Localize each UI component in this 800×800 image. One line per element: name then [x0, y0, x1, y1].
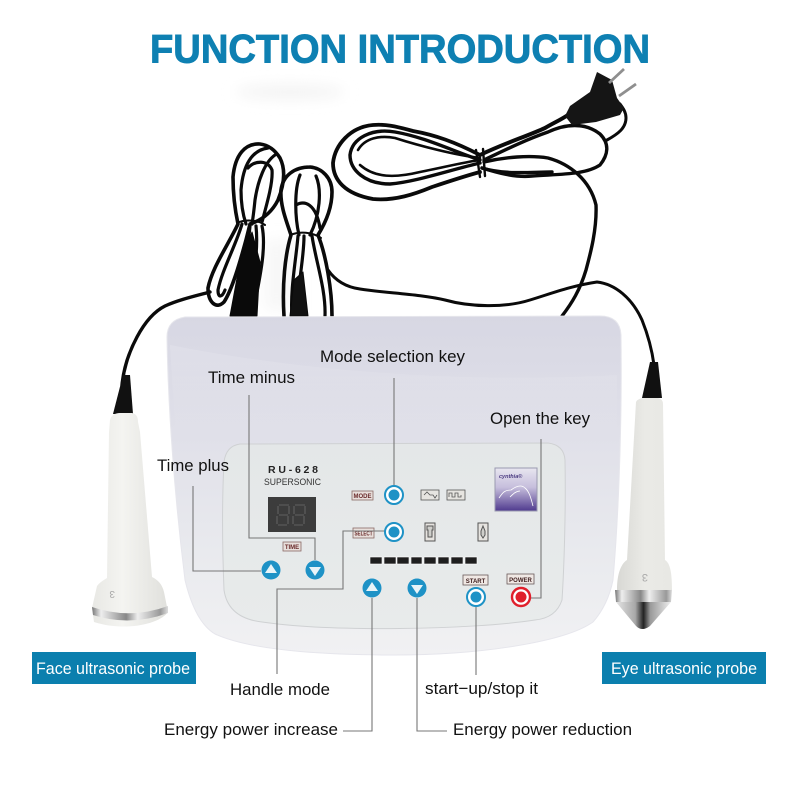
label: mode selection key: Mode selection key	[320, 347, 465, 366]
connector lines	[193, 378, 541, 731]
callout: face ultrasonic probe	[32, 652, 196, 684]
title: FUNCTION INTRODUCTION	[150, 28, 650, 72]
key labels: SELECT	[354, 532, 373, 538]
key labels: TIME	[285, 545, 299, 551]
model name: SUPERSONIC	[264, 477, 321, 487]
energy increase key	[362, 578, 382, 598]
callout: eye ultrasonic probe	[602, 652, 766, 684]
handle mode icons	[425, 523, 488, 541]
time plus key	[262, 560, 280, 580]
label: start-up/stop it: start−up/stop it	[425, 679, 538, 698]
label: open the key: Open the key	[490, 409, 590, 428]
face ultrasonic probe: 3	[109, 588, 115, 599]
mode key	[385, 486, 403, 504]
faint table shadows	[235, 85, 345, 310]
label: time plus: Time plus	[157, 456, 229, 475]
label: energy power reduction: Energy power reduction	[453, 720, 632, 739]
label: handle mode: Handle mode	[230, 680, 330, 699]
model name	[264, 464, 321, 487]
power key	[512, 588, 530, 606]
callout: eye ultrasonic probe: Eye ultrasonic probe	[611, 660, 757, 678]
long probe cable	[328, 270, 654, 365]
energy level bar	[370, 557, 477, 564]
waveform icons	[421, 490, 465, 500]
eye ultrasonic probe	[615, 362, 672, 629]
right bundle	[281, 167, 332, 316]
left bundle	[208, 144, 284, 305]
time minus key	[306, 560, 324, 580]
key labels: MODE	[354, 494, 372, 500]
device body	[167, 316, 621, 655]
digital display	[268, 497, 316, 532]
brand logo	[495, 468, 537, 511]
model name: RU-628	[268, 464, 318, 476]
key labels	[283, 491, 534, 585]
face ultrasonic probe	[92, 375, 168, 627]
probe and bundled cables	[122, 144, 654, 385]
key labels: POWER	[509, 578, 532, 584]
eye ultrasonic probe: 3	[642, 571, 648, 583]
control panel inset	[222, 443, 565, 629]
select key	[385, 523, 403, 541]
start key	[467, 588, 485, 606]
label: time minus: Time minus	[208, 368, 295, 387]
power cord and plug	[333, 69, 636, 316]
brand logo: cynthia®	[499, 473, 523, 480]
callout: face ultrasonic probe: Face ultrasonic probe	[36, 660, 190, 678]
label: energy power increase: Energy power increase	[164, 720, 338, 739]
plug body	[565, 69, 636, 125]
key labels: START	[466, 579, 486, 585]
energy decrease key	[408, 578, 426, 598]
round buttons	[262, 486, 530, 606]
